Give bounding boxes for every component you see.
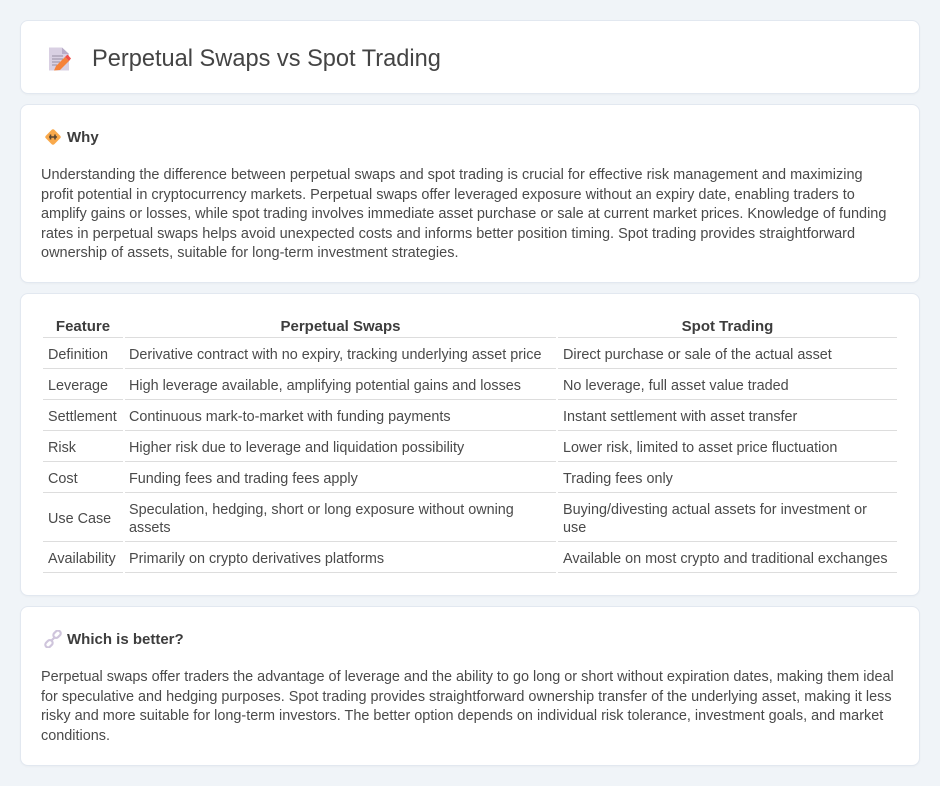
comparison table: Instant settlement with asset transfer xyxy=(563,409,797,425)
text block: which is better: for speculative and hedging purposes. Spot trading provides straightforward ownership transfer of the underlying asset, making it less xyxy=(41,688,892,704)
comparison table: Spot Trading xyxy=(682,318,773,335)
comparison table: Cost xyxy=(48,471,78,487)
comparison table: Risk xyxy=(48,440,76,456)
comparison table: Higher risk due to leverage and liquidation possibility xyxy=(129,440,464,456)
icon: document with pencil xyxy=(49,48,71,70)
text block: why xyxy=(41,167,886,261)
comparison table: Perpetual Swaps xyxy=(280,318,401,335)
comparison table: Available on most crypto and traditional exchanges xyxy=(563,551,888,567)
comparison table: Continuous mark-to-market with funding payments xyxy=(129,409,451,425)
title: Perpetual Swaps vs Spot Trading xyxy=(92,46,441,72)
comparison table: Primarily on crypto derivatives platforms xyxy=(129,551,384,567)
comparison table: Buying/divesting actual assets for investment or xyxy=(563,502,867,518)
comparison table: Direct purchase or sale of the actual asset xyxy=(563,347,832,363)
panel: why xyxy=(20,104,920,283)
text block: why: amplify gains or losses, while spot trading involves immediate asset purchase or sale at current market prices. Knowledge of funding xyxy=(41,206,886,222)
text block: why: Understanding the difference between perpetual swaps and spot trading is crucial for effective risk management and maximizing xyxy=(41,167,863,183)
text block: why: rates in perpetual swaps helps avoid unexpected costs and informs better position timing. Spot trading provides straightforward xyxy=(41,226,855,242)
text block: which is better: conditions. xyxy=(41,728,110,744)
comparison table: Definition xyxy=(48,347,108,363)
comparison table xyxy=(43,318,897,573)
comparison table: No leverage, full asset value traded xyxy=(563,378,789,394)
icon: diamond sign xyxy=(45,129,61,145)
panel: comparison table xyxy=(20,293,920,596)
icon: chain link xyxy=(44,630,62,648)
text block: why: ownership of assets, suitable for long-term investment strategies. xyxy=(41,245,458,261)
text block: which is better xyxy=(41,669,894,744)
comparison table: Trading fees only xyxy=(563,471,673,487)
panel: title header xyxy=(20,20,920,94)
comparison table: Speculation, hedging, short or long exposure without owning xyxy=(129,502,514,518)
text block: which is better: risky and more suitable for long-term investors. The better option depends on individual risk tolerance, investment goals, and market xyxy=(41,708,883,724)
comparison table: use xyxy=(563,520,586,536)
comparison table: Feature xyxy=(56,318,110,335)
heading: why: Why xyxy=(67,129,99,146)
heading: which is better: Which is better? xyxy=(67,631,184,648)
panel: which is better xyxy=(20,606,920,766)
comparison table: Use Case xyxy=(48,511,111,527)
comparison table: High leverage available, amplifying potential gains and losses xyxy=(129,378,521,394)
comparison table: Leverage xyxy=(48,378,108,394)
comparison table: Settlement xyxy=(48,409,117,425)
comparison table: Derivative contract with no expiry, tracking underlying asset price xyxy=(129,347,541,363)
comparison table: Availability xyxy=(48,551,116,567)
text block: which is better: Perpetual swaps offer traders the advantage of leverage and the ability to go long or short without expiration dates, making them ideal xyxy=(41,669,894,685)
comparison table: Lower risk, limited to asset price fluctuation xyxy=(563,440,837,456)
text block: why: profit potential in cryptocurrency markets. Perpetual swaps offer leveraged exposure without an expiry date, enabling traders to xyxy=(41,186,855,202)
comparison table: assets xyxy=(129,520,171,536)
comparison table: Funding fees and trading fees apply xyxy=(129,471,358,487)
